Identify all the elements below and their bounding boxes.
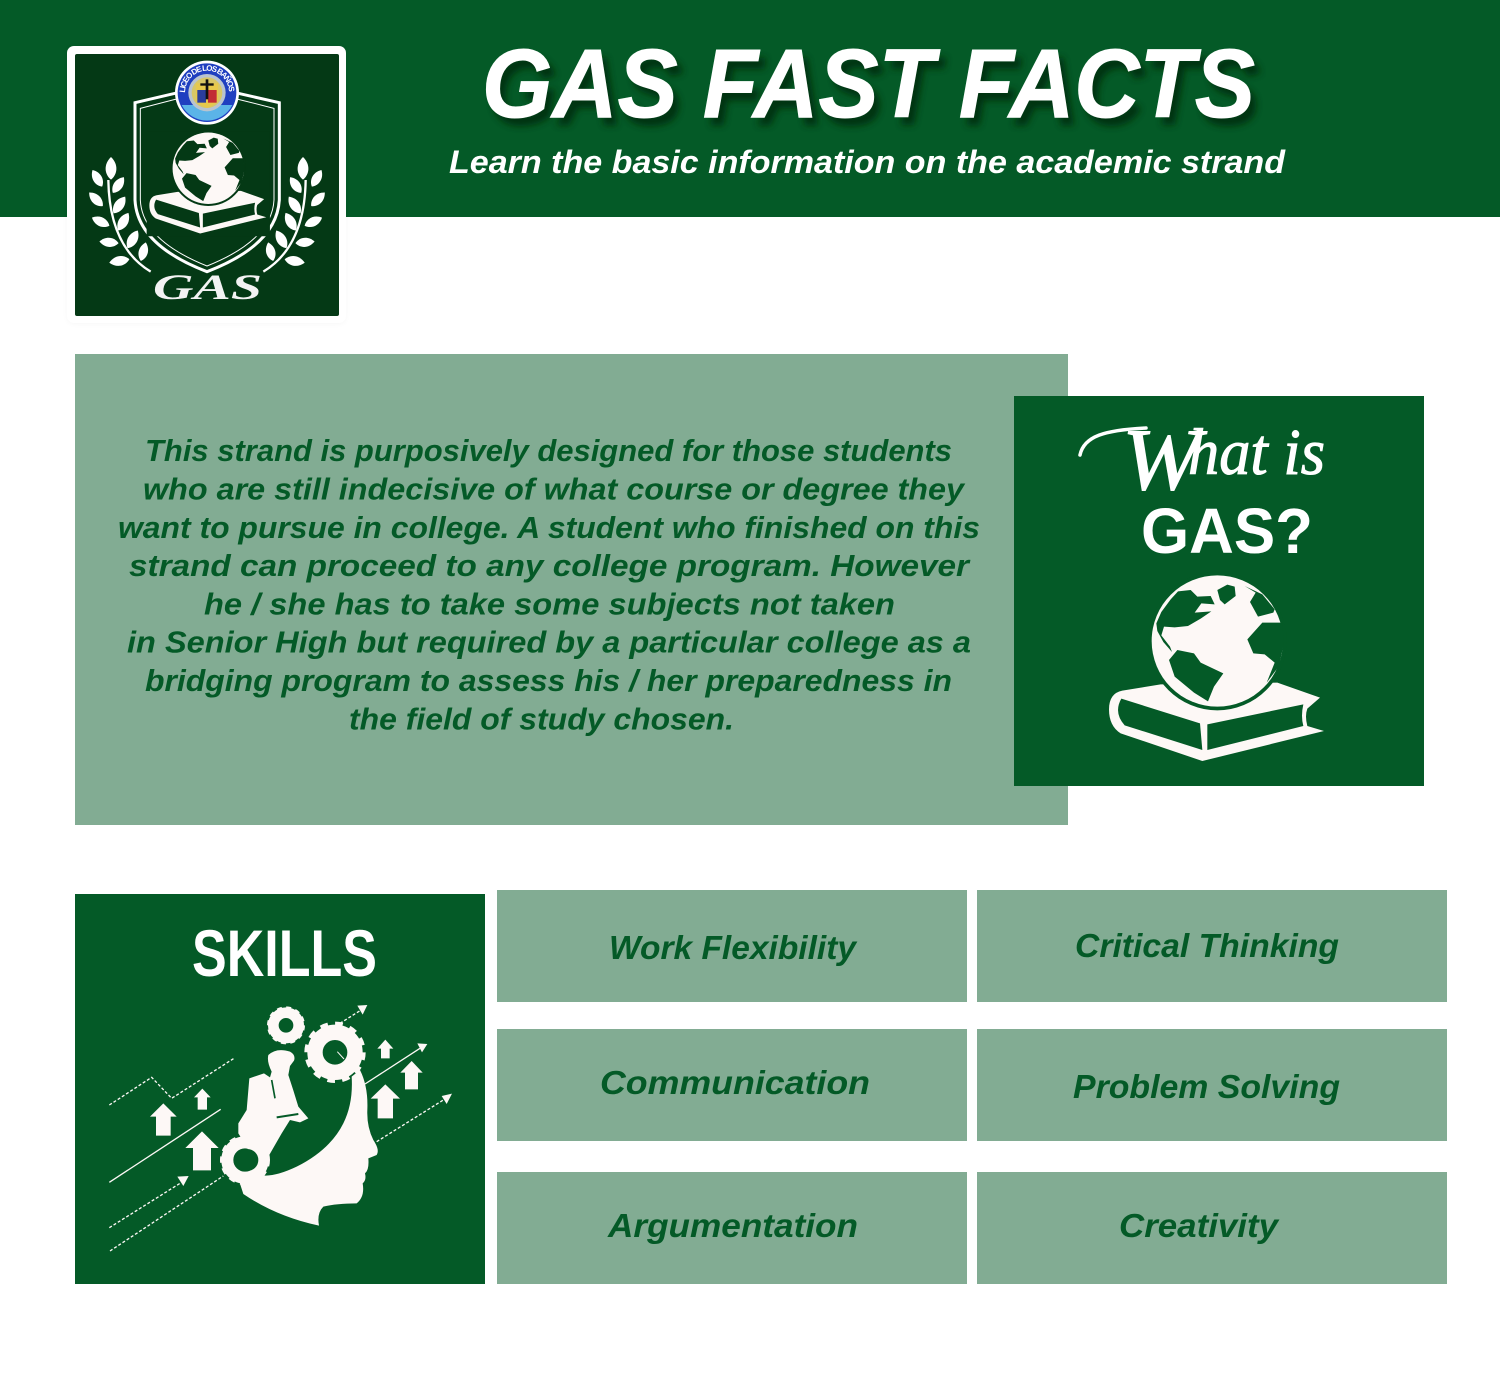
- seal: [175, 60, 239, 125]
- skill: Work Flexibility: [497, 890, 967, 1002]
- skill: Problem Solving: [977, 1029, 1447, 1141]
- skill: Communication: Communication: [600, 1065, 870, 1102]
- title: GAS FAST FACTS: [488, 37, 1261, 146]
- heading: GAS?: GAS?: [1141, 495, 1313, 567]
- description text: [118, 434, 980, 736]
- logo: laurels, shield and seal: [89, 60, 325, 274]
- description text: the field of study chosen.: [349, 702, 734, 736]
- description text: in Senior High but required by a particular college as a: [127, 626, 971, 660]
- icon: globe on book: [1109, 572, 1324, 761]
- icon: logo globe on book: [147, 131, 270, 236]
- description text: who are still indecisive of what course or degree they: [143, 472, 966, 506]
- skill: Work Flexibility: Work Flexibility: [609, 930, 858, 967]
- skill: Argumentation: [497, 1172, 967, 1284]
- heading: What is: [1080, 412, 1325, 509]
- panel: skills: [75, 894, 485, 1284]
- header band: [0, 0, 1500, 217]
- logo text: GAS: [153, 267, 262, 307]
- skill: Critical Thinking: [977, 890, 1447, 1002]
- heading: skills: SKILLS: [192, 916, 377, 990]
- description text: strand can proceed to any college program. However: [129, 549, 971, 583]
- skill: Argumentation: Argumentation: [607, 1208, 858, 1245]
- description text: want to pursue in college. A student who finished on this: [118, 511, 980, 545]
- description text: he / she has to take some subjects not taken: [204, 588, 895, 622]
- description text: This strand is purposively designed for those students: [145, 434, 952, 468]
- skill: Critical Thinking: Critical Thinking: [1075, 928, 1339, 965]
- skill: Creativity: [977, 1172, 1447, 1284]
- skill: Communication: [497, 1029, 967, 1141]
- skill: Problem Solving: Problem Solving: [1073, 1069, 1340, 1106]
- skill: Creativity: Creativity: [1119, 1208, 1280, 1245]
- panel: what is GAS: [1014, 396, 1424, 786]
- description text: bridging program to assess his / her preparedness in: [145, 664, 952, 698]
- subtitle: Learn the basic information on the academic strand: [449, 144, 1287, 180]
- seal: LICEO DE LOS BAÑOS: [180, 65, 234, 92]
- illustration: head with gears and arrows: [109, 1005, 452, 1251]
- panel: description: [75, 354, 1068, 825]
- heading: What is: hat is: [1188, 416, 1325, 489]
- title: GAS FAST FACTS: [482, 29, 1255, 138]
- logo badge: [67, 46, 346, 316]
- heading: What is: W: [1122, 412, 1207, 509]
